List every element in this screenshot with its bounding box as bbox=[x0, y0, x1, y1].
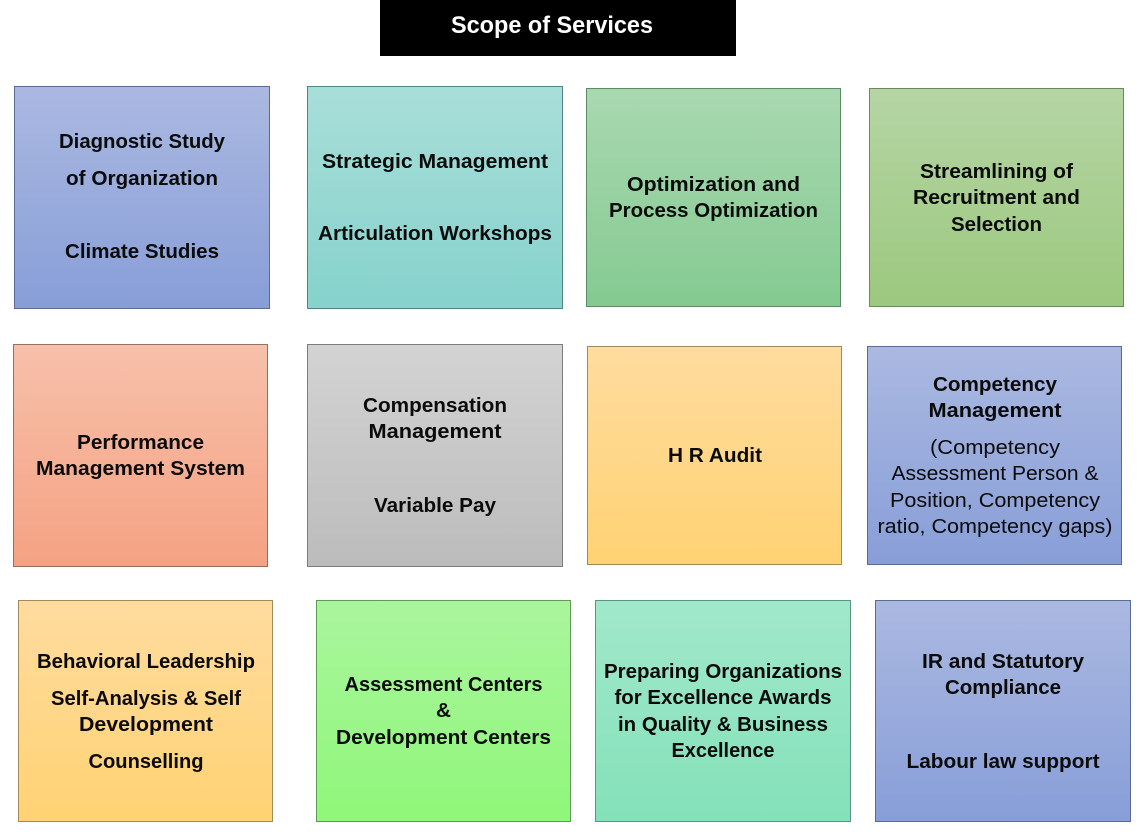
title: Scope of Services bbox=[451, 12, 653, 39]
panel text: excellence awards bbox=[604, 661, 842, 762]
panel: hr audit bbox=[588, 346, 842, 564]
panel: performance management bbox=[14, 344, 268, 566]
panel text: compensation management: Variable Pay bbox=[374, 495, 497, 517]
panel text: competency management: Competency bbox=[933, 374, 1058, 396]
panel text: competency management: ratio, Competency gaps) bbox=[878, 516, 1112, 538]
panel text: competency management: Management bbox=[928, 400, 1062, 422]
title bbox=[380, 0, 736, 56]
panel text: diagnostic study bbox=[59, 131, 226, 263]
panel text: recruitment and selection: Recruitment and bbox=[913, 187, 1080, 209]
panel text: excellence awards: for Excellence Awards bbox=[614, 687, 832, 709]
panel text: strategic management: Strategic Management bbox=[322, 151, 548, 173]
panel text: compensation management: Compensation bbox=[363, 395, 507, 417]
panel text: performance management bbox=[36, 432, 245, 480]
panel text: assessment centers: & bbox=[436, 700, 451, 722]
panel: assessment centers bbox=[316, 600, 570, 822]
panel: recruitment and selection bbox=[870, 88, 1124, 306]
panel text: diagnostic study: Diagnostic Study bbox=[59, 131, 226, 153]
panel text: behavioral leadership: Counselling bbox=[88, 751, 204, 773]
panel: process optimization bbox=[586, 88, 840, 306]
panel text: statutory compliance bbox=[906, 651, 1100, 773]
panel: compensation management bbox=[308, 344, 562, 566]
panel text: diagnostic study: Climate Studies bbox=[65, 241, 219, 263]
panel text: excellence awards: Preparing Organizations bbox=[604, 661, 842, 683]
panel text: competency management: Position, Competency bbox=[890, 490, 1100, 512]
panel text: hr audit: H R Audit bbox=[668, 445, 762, 467]
panel text: recruitment and selection bbox=[913, 161, 1080, 236]
panel text: competency management bbox=[878, 374, 1112, 538]
panel: behavioral leadership bbox=[18, 600, 272, 822]
panel text: statutory compliance: IR and Statutory bbox=[922, 651, 1085, 673]
panel text: assessment centers: Assessment Centers bbox=[344, 674, 542, 696]
panel: statutory compliance bbox=[876, 600, 1130, 822]
panel: diagnostic study bbox=[14, 86, 270, 308]
panel text: process optimization: Process Optimization bbox=[609, 200, 818, 222]
panel text: performance management: Performance bbox=[77, 432, 204, 454]
panel text: process optimization: Optimization and bbox=[627, 174, 800, 196]
panel text: assessment centers bbox=[336, 674, 551, 749]
panel text: compensation management bbox=[363, 395, 507, 517]
panel: excellence awards bbox=[596, 600, 850, 822]
panel text: behavioral leadership: Self-Analysis & Self bbox=[51, 688, 241, 710]
panel text: behavioral leadership: Behavioral Leadership bbox=[37, 651, 255, 673]
panel text: excellence awards: in Quality & Business bbox=[618, 714, 828, 736]
panel text: recruitment and selection: Streamlining of bbox=[920, 161, 1073, 183]
panel: strategic management bbox=[308, 86, 562, 308]
panel text: assessment centers: Development Centers bbox=[336, 727, 551, 749]
panel text: process optimization bbox=[609, 174, 818, 222]
panel text: behavioral leadership bbox=[37, 651, 255, 773]
panel text: strategic management: Articulation Workshops bbox=[318, 223, 552, 245]
panel text: competency management: Assessment Person & bbox=[892, 463, 1099, 485]
panel text: performance management: Management System bbox=[36, 458, 245, 480]
panel text: diagnostic study: of Organization bbox=[66, 168, 218, 190]
panel: competency management bbox=[868, 346, 1122, 564]
panel text: statutory compliance: Compliance bbox=[945, 677, 1061, 699]
panel text: behavioral leadership: Development bbox=[79, 714, 213, 736]
panel text: strategic management bbox=[318, 151, 552, 245]
panel text: competency management: (Competency bbox=[930, 437, 1060, 459]
panel text: compensation management: Management bbox=[368, 421, 502, 443]
panel text: statutory compliance: Labour law support bbox=[906, 751, 1100, 773]
panel text: excellence awards: Excellence bbox=[672, 740, 774, 762]
panel text: recruitment and selection: Selection bbox=[951, 214, 1042, 236]
